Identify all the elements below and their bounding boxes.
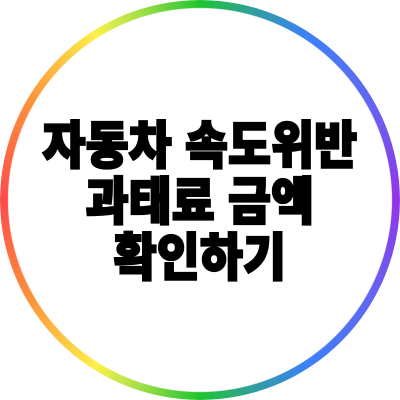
title line 2: 과태료 금액 (86, 173, 314, 231)
title line 3: 확인하기 (114, 229, 286, 287)
title line 1: 자동차 속도위반 (43, 117, 357, 175)
